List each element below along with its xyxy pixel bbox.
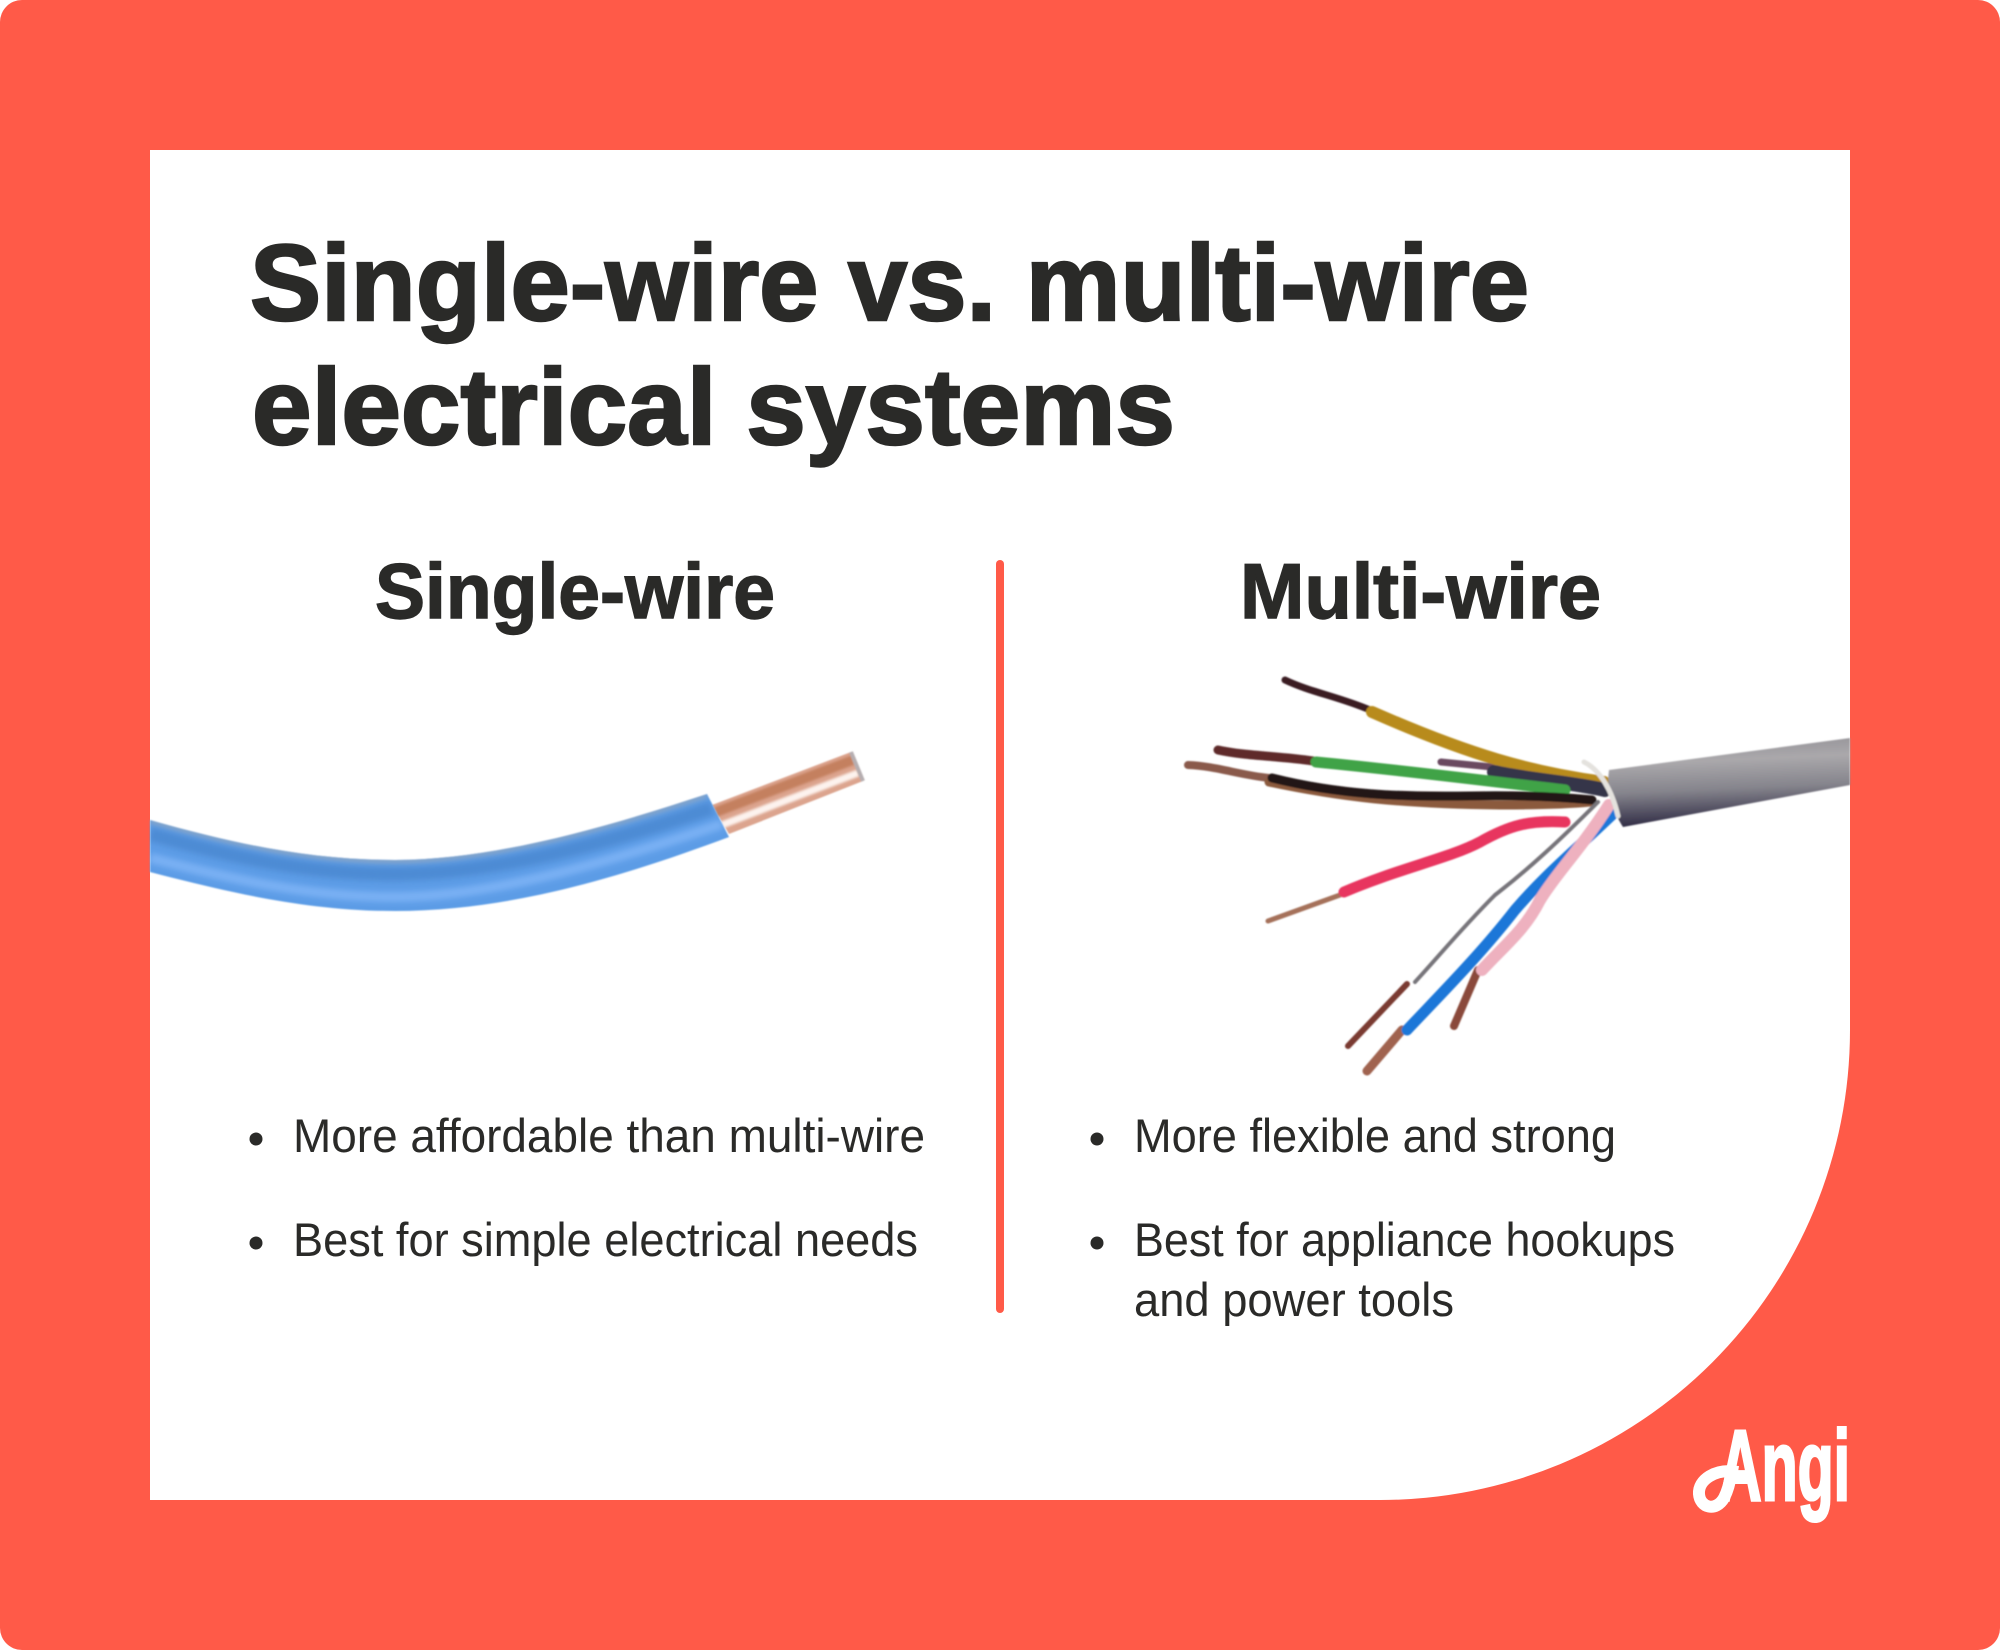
heading: multi-wire: Multi-wire <box>1240 547 1601 635</box>
center divider <box>996 560 1004 1313</box>
blue insulation <box>150 794 729 911</box>
bullets: multi-wire <box>1090 1109 1675 1326</box>
logo: Angi <box>1699 1410 1850 1522</box>
sheath ring <box>1584 762 1618 816</box>
title <box>250 222 1529 467</box>
blue wire <box>1407 813 1614 1030</box>
black and brown wire <box>1269 778 1592 805</box>
grey wire <box>1415 802 1598 982</box>
bullets: single-wire: Best for simple electrical needs <box>293 1213 918 1266</box>
logo: Angi: Angi <box>1719 1410 1850 1522</box>
title: Single-wire vs. multi-wire <box>250 222 1529 343</box>
panel: white content card <box>150 150 1850 1500</box>
icon: multi-wire cable <box>1188 680 1850 1071</box>
red wire <box>1344 822 1565 892</box>
title: electrical systems <box>252 346 1175 467</box>
dark wire <box>1494 772 1605 790</box>
grey sheath <box>1608 738 1850 827</box>
bullets: multi-wire: Best for appliance hookups <box>1134 1213 1675 1266</box>
bullets: single-wire: More affordable than multi-wire <box>293 1109 925 1162</box>
gold wire <box>1372 712 1604 782</box>
green wire <box>1316 762 1565 790</box>
icon: single blue wire <box>150 752 863 911</box>
bullets: multi-wire: and power tools <box>1134 1273 1454 1326</box>
heading: single-wire: Single-wire <box>375 547 775 635</box>
stripped copper tips <box>1188 680 1492 1071</box>
copper conductor <box>712 752 863 834</box>
bullets: multi-wire: More flexible and strong <box>1134 1109 1616 1162</box>
pink wire <box>1482 805 1609 970</box>
bullets: single-wire <box>250 1109 925 1266</box>
